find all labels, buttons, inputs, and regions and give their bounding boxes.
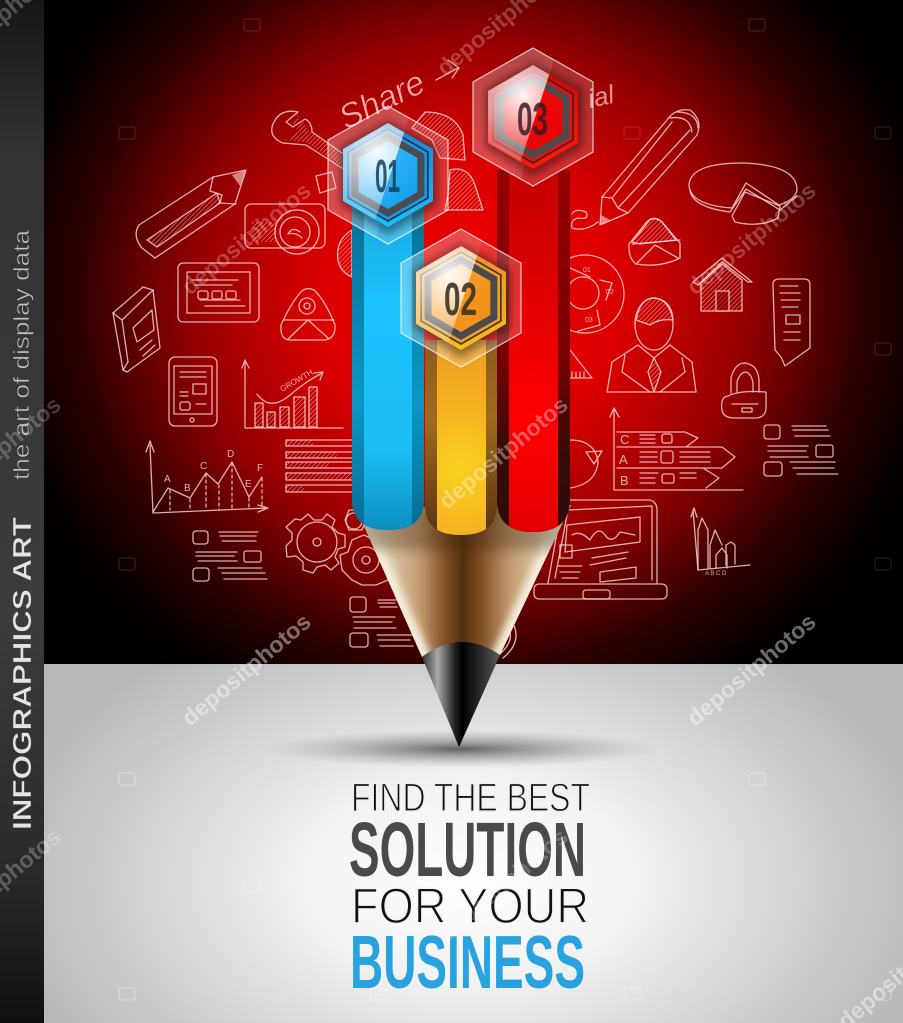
badge number 03: 03	[517, 93, 548, 145]
grey floor panel	[44, 664, 903, 1023]
horizontal bars sketch	[286, 440, 352, 492]
depositphotos watermarks: depositphotos	[434, 823, 573, 946]
laptop sketch	[534, 500, 667, 599]
pencil graphite tip	[422, 642, 500, 747]
red backdrop panel	[44, 0, 903, 664]
speech document sketch	[773, 279, 810, 366]
pie infographic sketch: 03	[585, 317, 593, 324]
arrow bars chart sketch: C	[620, 432, 629, 447]
pie chart sketch	[689, 163, 797, 224]
icon: email envelope sketch	[281, 289, 335, 340]
list sketch under gears	[350, 597, 413, 647]
badge glass plate	[401, 229, 521, 368]
badge 01: 01	[375, 150, 400, 202]
depositphotos watermarks: depositphotos	[434, 391, 573, 514]
circular arrow sketch	[570, 440, 602, 488]
padlock sketch	[722, 363, 766, 418]
badge 03	[473, 48, 593, 187]
gears sketch	[286, 510, 388, 585]
sidebar tagline: the art of display data	[9, 229, 34, 480]
depositphotos watermarks: depositphotos	[682, 608, 821, 731]
headline line: business: BUSINESS	[350, 920, 585, 1004]
line chart sketch: E	[245, 479, 252, 490]
pie infographic sketch	[546, 255, 624, 333]
pie infographic sketch: 02	[606, 289, 614, 296]
line chart sketch	[146, 441, 268, 513]
left sidebar	[0, 0, 44, 1023]
badge hexagon	[343, 123, 433, 227]
badge hexagon	[416, 246, 506, 350]
icon: wrench sketch	[272, 111, 345, 170]
badge number 02: 02	[444, 273, 477, 325]
hatched hood sketch behind badge 01	[338, 112, 483, 277]
depositphotos watermarks: depositphotos	[177, 608, 316, 731]
icon: small nut sketch	[316, 172, 336, 193]
blue pencil bar	[352, 200, 424, 535]
line chart sketch: F	[257, 463, 263, 474]
line chart sketch: A	[164, 474, 171, 485]
headline	[349, 776, 590, 1004]
small bar arrows chart sketch: A B C D	[705, 571, 727, 577]
arrow bars chart sketch: B	[620, 473, 629, 488]
arrow bars chart sketch: A	[619, 452, 628, 467]
headline line: solution: SOLUTION	[349, 807, 586, 893]
businessman sketch	[607, 298, 696, 392]
big pencil sketch	[572, 110, 699, 229]
list sketch left	[193, 531, 267, 581]
growth bar chart sketch: GROWTH	[278, 368, 315, 394]
circle sketch near pencil tip	[500, 618, 516, 658]
icon: book sketch	[113, 287, 160, 372]
depositphotos watermarks: depositphotos	[177, 177, 316, 300]
arrow bars chart sketch	[610, 408, 743, 490]
icon: camera sketch	[245, 204, 325, 254]
growth bar chart sketch	[242, 360, 343, 428]
badge hexagon	[488, 65, 578, 169]
depositphotos watermarks: depositphotos	[682, 177, 821, 300]
icon: tablet sketch	[178, 263, 259, 322]
pencil illustration	[345, 170, 580, 747]
badge glass plate	[328, 106, 448, 245]
house sketch	[693, 258, 752, 311]
ruler triangle sketch	[570, 350, 592, 378]
sketch: share handwriting: Share	[333, 63, 431, 137]
headline line: for your: FOR YOUR	[351, 878, 589, 934]
small bar arrows chart sketch	[691, 508, 750, 577]
line chart sketch: C	[200, 461, 207, 472]
pie infographic sketch: 01	[583, 267, 591, 274]
list sketch right	[764, 425, 838, 476]
badge glass plate	[473, 48, 593, 187]
badge 02	[401, 229, 521, 368]
red pencil bar	[497, 170, 570, 535]
pencil wood cone	[362, 505, 571, 657]
icon: smartphone sketch	[169, 357, 217, 426]
open envelope sketch	[629, 218, 680, 265]
icon: crayon sketch	[136, 170, 246, 258]
line chart sketch: D	[227, 449, 234, 460]
badge 01	[328, 106, 448, 245]
sidebar title: INFOGRAPHICS ART	[7, 517, 37, 830]
floor shadow	[260, 730, 660, 768]
headline line: find the best: FIND THE BEST	[351, 776, 590, 820]
sketch: social handwriting fragment: ial	[585, 79, 618, 114]
orange pencil bar	[425, 340, 497, 538]
line chart sketch: B	[184, 483, 191, 494]
